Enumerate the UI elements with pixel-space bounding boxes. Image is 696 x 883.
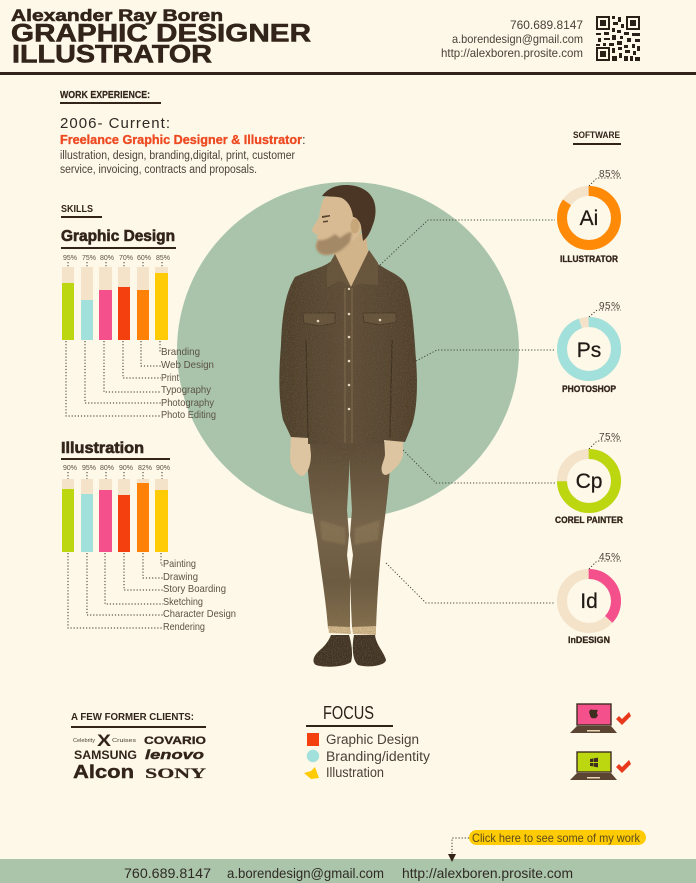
header divider bbox=[0, 72, 696, 75]
logos: Cruises bbox=[112, 738, 137, 744]
bar chart: illustration bbox=[62, 465, 170, 552]
bar chart: illustration: 80% bbox=[100, 465, 114, 472]
panel: former clients bbox=[71, 711, 207, 782]
bar labels: graphic design: Photography bbox=[161, 397, 215, 409]
shirt buttons bbox=[317, 288, 381, 410]
role: Freelance Graphic Designer & Illustrator bbox=[60, 132, 302, 147]
panel: software bbox=[555, 130, 623, 645]
logos: COVARIO bbox=[144, 735, 207, 747]
footer email: a.borendesign@gmail.com bbox=[227, 865, 384, 881]
logos: X bbox=[97, 731, 112, 750]
description line 1: illustration, design, branding,digital, print, customer bbox=[60, 150, 295, 162]
bar chart: graphic design: 60% bbox=[137, 255, 151, 262]
beard bbox=[316, 232, 352, 255]
legend: branding/identity: Branding/identity bbox=[326, 749, 430, 764]
job title: graphic designer: GRAPHIC DESIGNER bbox=[11, 20, 311, 48]
bar chart: illustration: 90% bbox=[63, 465, 77, 472]
heading: former clients: A FEW FORMER CLIENTS: bbox=[71, 711, 194, 723]
bar labels: illustration: Sketching bbox=[163, 596, 203, 608]
ring chart: corel painter 75%: COREL PAINTER bbox=[555, 515, 623, 525]
legend: illustration: Illustration bbox=[326, 765, 384, 780]
role colon: : bbox=[302, 132, 306, 147]
arrow: to website bbox=[448, 838, 469, 862]
bar labels: graphic design: Photo Editing bbox=[161, 409, 216, 421]
heading: illustration: Illustration bbox=[61, 440, 144, 457]
contact website: http://alexboren.prosite.com bbox=[441, 46, 583, 60]
ring chart: photoshop 95% bbox=[562, 301, 621, 394]
neck bbox=[332, 232, 369, 287]
ring chart: illustrator 85%: ILLUSTRATOR bbox=[560, 254, 618, 264]
panel: illustration skills bbox=[61, 440, 236, 633]
description line 2: service, invoicing, contracts and proposals. bbox=[60, 164, 257, 176]
logos: Alcon bbox=[73, 762, 134, 782]
bar chart: graphic design: 85% bbox=[156, 255, 170, 262]
bar labels: illustration: Painting bbox=[163, 558, 196, 570]
hair bbox=[322, 185, 376, 241]
bar labels: illustration: Drawing bbox=[163, 571, 198, 583]
heading: focus: FOCUS bbox=[323, 703, 374, 723]
logos: SAMSUNG bbox=[74, 748, 137, 762]
leader lines: illustration bbox=[68, 553, 163, 628]
green background circle bbox=[177, 182, 519, 518]
ring chart: corel painter 75%: Cp bbox=[576, 470, 602, 493]
bar chart: graphic design: 75% bbox=[82, 255, 96, 262]
footer phone: 760.689.8147 bbox=[124, 865, 211, 881]
logos: SONY bbox=[145, 766, 206, 782]
panel: focus legend bbox=[304, 703, 430, 780]
bar chart: graphic design: 70% bbox=[119, 255, 133, 262]
bar chart: graphic design: 95% bbox=[63, 255, 77, 262]
ring chart: illustrator 85%: Ai bbox=[580, 207, 598, 230]
ring chart: photoshop 95%: 95% bbox=[599, 301, 620, 312]
figure: portrait of man bbox=[279, 185, 417, 667]
ring chart: photoshop 95%: Ps bbox=[577, 339, 601, 362]
eye and brow bbox=[322, 215, 330, 222]
bar labels: graphic design: Web Design bbox=[161, 359, 214, 371]
logos: Celebrity bbox=[73, 738, 96, 744]
bar labels: illustration bbox=[163, 558, 236, 633]
icon: windows laptop with check bbox=[570, 752, 631, 780]
logos bbox=[73, 731, 207, 782]
name: Alexander Ray Boren bbox=[11, 6, 223, 25]
shoes and trousers bbox=[306, 442, 391, 667]
bar labels: graphic design bbox=[161, 346, 216, 421]
logos: lenovo bbox=[145, 747, 204, 762]
bar chart: illustration: 95% bbox=[82, 465, 96, 472]
leader lines: graphic design bbox=[66, 341, 161, 416]
bar labels: illustration: Character Design bbox=[163, 608, 236, 620]
bar labels: illustration: Rendering bbox=[163, 621, 205, 633]
panel: work experience bbox=[60, 89, 306, 176]
footer bar bbox=[0, 859, 696, 883]
legend: graphic design: Graphic Design bbox=[326, 732, 419, 747]
face bbox=[312, 194, 362, 255]
bar chart: illustration: 90% bbox=[156, 465, 170, 472]
bar labels: graphic design: Print bbox=[161, 372, 179, 384]
icon: QR code bbox=[596, 16, 640, 61]
footer website: http://alexboren.prosite.com bbox=[402, 865, 573, 881]
bar chart: graphic design: 80% bbox=[100, 255, 114, 262]
ring chart: illustrator 85% bbox=[560, 169, 621, 264]
date range: 2006- Current: bbox=[60, 115, 170, 132]
bar chart: graphic design bbox=[62, 255, 170, 340]
header bbox=[11, 6, 640, 68]
icon: apple laptop with check bbox=[570, 704, 631, 733]
ring chart: indesign 45%: InDESIGN bbox=[568, 635, 610, 645]
heading: work experience: WORK EXPERIENCE: bbox=[60, 89, 150, 101]
heading: graphic design: Graphic Design bbox=[61, 228, 175, 245]
shirt bbox=[279, 250, 417, 444]
ring chart: indesign 45%: Id bbox=[580, 590, 598, 613]
contact phone: 760.689.8147 bbox=[510, 18, 583, 32]
bar labels: graphic design: Branding bbox=[161, 346, 200, 358]
ring chart: corel painter 75% bbox=[555, 432, 623, 525]
job title: illustrator: ILLUSTRATOR bbox=[12, 40, 212, 68]
ring chart: corel painter 75%: 75% bbox=[599, 432, 620, 443]
panel: graphic design skills bbox=[61, 204, 216, 421]
ring chart: indesign 45%: 45% bbox=[599, 552, 620, 563]
ear bbox=[350, 218, 360, 234]
ring chart: illustrator 85%: 85% bbox=[599, 169, 620, 180]
ring chart: indesign 45% bbox=[562, 552, 621, 645]
ring chart: photoshop 95%: PHOTOSHOP bbox=[562, 384, 616, 394]
heading: skills: SKILLS bbox=[61, 204, 93, 215]
connectors from figure to software rings bbox=[380, 220, 555, 603]
contact email: a.borendesign@gmail.com bbox=[452, 32, 583, 46]
hands bbox=[290, 434, 311, 476]
bar labels: graphic design: Typography bbox=[161, 384, 212, 396]
bar chart: illustration: 90% bbox=[119, 465, 133, 472]
bar chart: illustration: 82% bbox=[138, 465, 152, 472]
heading: software: SOFTWARE bbox=[573, 130, 620, 141]
bar labels: illustration: Story Boarding bbox=[163, 583, 226, 595]
callout: see my work: Click here to see some of my work bbox=[472, 831, 641, 845]
